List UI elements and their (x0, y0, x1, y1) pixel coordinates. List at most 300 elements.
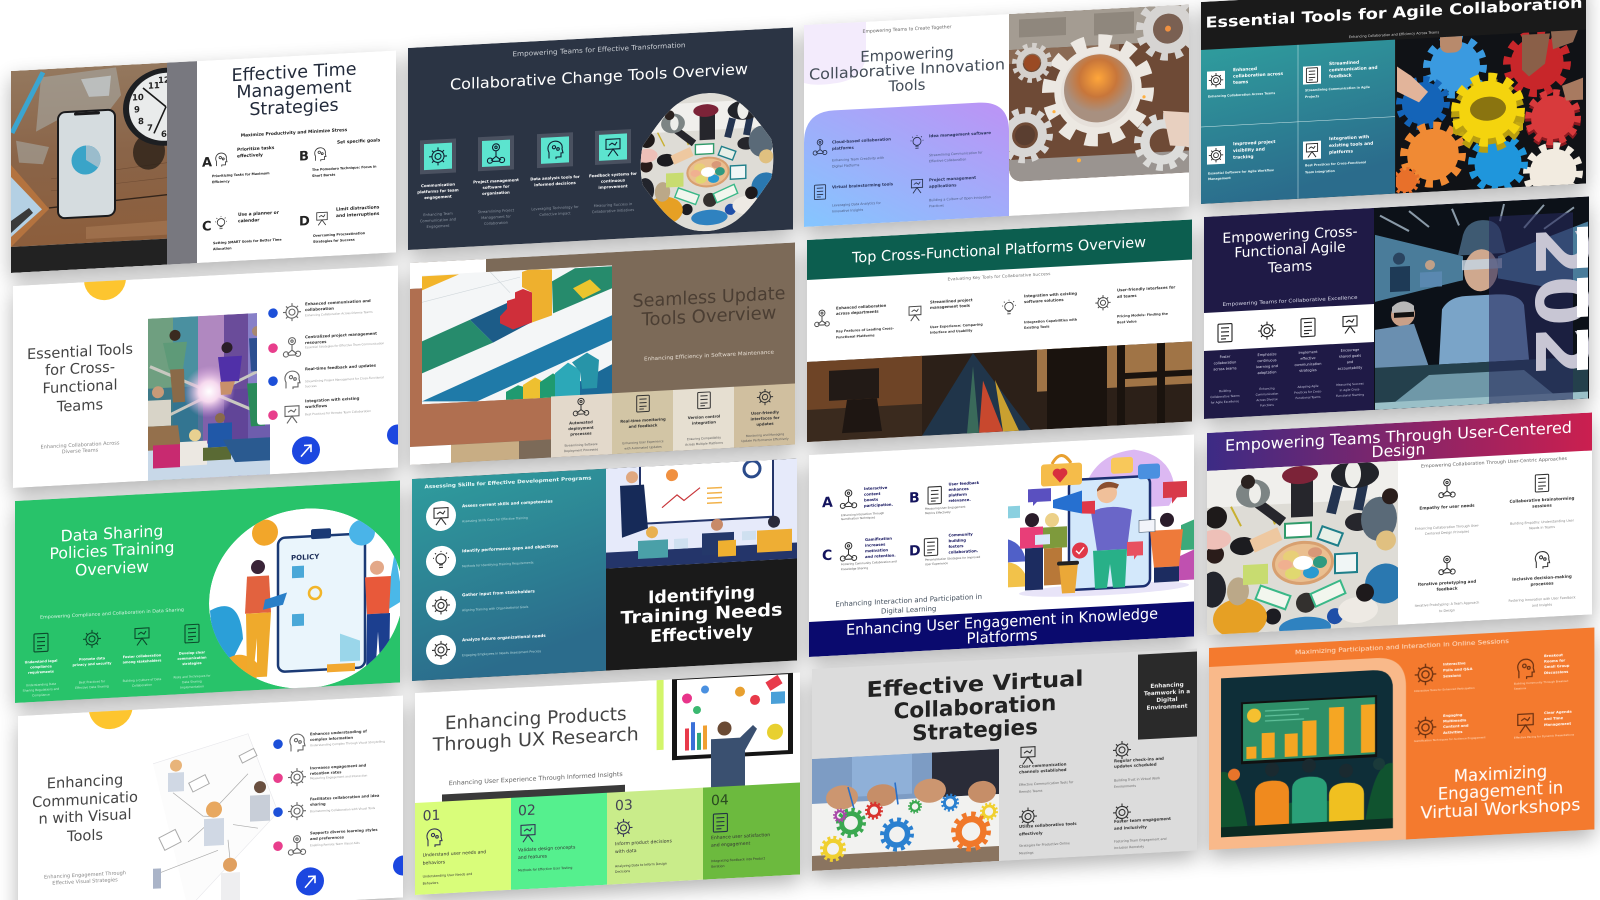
item 2: Methods for Identifying Training Requirements (462, 561, 534, 568)
item D: Strategies for Success (313, 238, 355, 244)
column 4 (173, 624, 211, 690)
item 3: to Design (1439, 608, 1455, 613)
column 2 (73, 629, 112, 690)
item A: A (202, 155, 212, 171)
panel: Empowering Cross-Functional Agile Teams: Functional Agile (1234, 239, 1346, 261)
item 2 (1510, 473, 1575, 531)
panel: Identifying Training Needs Effectively: Effectively (650, 622, 754, 647)
item 1: platforms for team (417, 187, 459, 195)
item 4: User-friendly interfaces for (1117, 284, 1175, 292)
item 3: Improved project (1233, 139, 1276, 147)
card 03: with data (615, 848, 637, 855)
column 3: strategies (1299, 368, 1317, 373)
item 2 (1514, 653, 1570, 691)
item A: Prioritize tasks (237, 145, 275, 153)
item 3: Integration with existing (1024, 291, 1077, 298)
item 2: Building Community Through Breakout (1514, 679, 1569, 686)
item 4: Inclusive decision-making (1512, 574, 1572, 582)
subtitle: Evaluating Key Tools for Collaborative Success (947, 271, 1050, 282)
column 1: requirements (28, 670, 54, 675)
item 2 (268, 330, 384, 358)
item 3: Streamlining Project Management for Cross-Functional (305, 375, 384, 383)
card 2: Enhancing User Experience (622, 439, 664, 445)
item 1: Assess current skills and competencies (462, 498, 553, 508)
panel: Empowering Cross-Functional Agile Teams: Adapting Agile (1297, 384, 1319, 389)
title: Seamless Update (632, 283, 785, 312)
photo: phone and clock on wood: 6 (161, 130, 167, 140)
item 2: communication and (1329, 65, 1378, 73)
panel: Empowering Cross-Functional Agile Teams: Functional Teaming (1336, 392, 1364, 398)
item 4: Team Integration (1305, 169, 1335, 174)
item 1 (417, 138, 459, 230)
photo: phone and clock on wood: 7 (147, 123, 153, 134)
item 3: Gather input from stakeholders (462, 588, 535, 597)
panel: Essential Tools for Agile Collaboration (1201, 0, 1586, 217)
item 2: Small Group (1544, 664, 1570, 669)
item D: collaboration. (948, 548, 979, 555)
screen with analyst (672, 670, 793, 791)
panel: Essential Tools for Cross-Functional Teams: Functional (42, 376, 118, 397)
item 1: platforms (832, 145, 854, 151)
card 2: with Automated Updates (624, 445, 662, 451)
item 4: and preferences (310, 835, 345, 841)
item C: motivation (865, 547, 888, 553)
item 3 (1207, 139, 1276, 181)
item C: Use a planner or (238, 210, 280, 218)
arrow button (296, 867, 324, 896)
item 2: Essential Strategies for Effective Team Communication (305, 341, 384, 349)
item A: participation. (864, 502, 894, 508)
item 2: Streamlining Project (478, 208, 515, 214)
item 1: across departments (836, 309, 879, 316)
item 2: User Experience: Comparing (930, 322, 983, 329)
item 4: Measuring Success in (594, 202, 632, 208)
column 1: across teams (1213, 366, 1237, 371)
card 04: 04 (711, 792, 729, 809)
column 3: communication (1294, 362, 1322, 367)
panel: Effective Virtual Collaboration Strategies (812, 648, 1197, 871)
item 4: Fostering Team Engagement and (1114, 837, 1167, 844)
item 2: Streamlined (1329, 60, 1359, 67)
item 3: Gamification Techniques for Audience Engagement (1414, 735, 1486, 743)
item 1 (1414, 661, 1475, 693)
item 2: Discussions (1544, 670, 1569, 675)
panel: Empowering Cross-Functional Agile Teams: for Agile Excellence (1211, 399, 1239, 405)
grey band (167, 61, 197, 265)
item C: and retention. (865, 552, 896, 559)
item D (299, 204, 380, 245)
column 4: Encourage (1341, 348, 1359, 353)
item 2 (426, 540, 559, 577)
panel: Data Sharing Policies Training Overview: Policies Training (50, 538, 174, 563)
column 1: Compliance (32, 693, 50, 697)
item 2: Environments (1114, 784, 1136, 789)
title: Effective Virtual (867, 667, 1084, 703)
item 1: Remote Teams (1019, 789, 1043, 794)
panel: Empowering Cross-Functional Agile Teams: Practices for Cross- (1294, 389, 1322, 395)
item 3: Brainstorming Collaboration with Visual Tools (310, 806, 376, 813)
item D: D (299, 214, 310, 230)
panel: Seamless Update Tools Overview (410, 242, 795, 465)
card 3: Ensuring Compatibility (687, 435, 721, 441)
column 4: Develop clear (179, 650, 205, 656)
item 3: Integration Capabilities with (1024, 318, 1078, 324)
item 3 (1415, 554, 1479, 614)
item 4: Collaborative Initiatives (592, 208, 634, 214)
item 1: Key Features of Leading Cross- (836, 326, 894, 333)
panel: Empowering Teams Through User-Centered Design (1193, 412, 1592, 669)
column 2: Emphasize (1258, 352, 1276, 357)
item D (909, 531, 980, 567)
illustration: connected people sketch (153, 732, 278, 900)
panel: Empowering Cross-Functional Agile Teams (1204, 196, 1600, 419)
item 1: Enhancing Team (423, 212, 453, 217)
item 4 (1095, 284, 1175, 326)
item A: Interactive (864, 485, 888, 491)
eyebrow: Empowering Teams to Create Together (863, 24, 952, 35)
item 1 (1207, 65, 1283, 99)
item 2: feedback (1329, 73, 1352, 80)
card 2: Real-time monitoring (620, 416, 666, 424)
item 4: Feedback systems for (589, 171, 637, 178)
item B: B (909, 490, 920, 507)
item 4: Pricing Models: Finding the (1117, 312, 1169, 318)
title: Essential Tools (27, 341, 133, 363)
panel: Top Cross-Functional Platforms Overview (807, 219, 1192, 442)
column 2: continuous (1257, 358, 1277, 363)
item 4 (589, 129, 637, 214)
item 1 (426, 495, 553, 532)
column 3: Collaboration (132, 683, 152, 688)
card 03: 03 (615, 797, 633, 814)
item 3: Management (1208, 176, 1231, 181)
photo: futuristic helmet team (1374, 196, 1589, 410)
panel: Empowering Cross-Functional Agile Teams: Communication (1256, 392, 1279, 397)
item 2: Regular check-ins and (1114, 756, 1164, 763)
panel: Essential Tools for Cross-Functional Teams: for Cross- (45, 359, 115, 379)
white icon band (1204, 304, 1374, 351)
title: Empowering Cross- (1222, 224, 1358, 247)
panel: Seamless Update Tools Overview: Tools Overview (641, 302, 776, 331)
item 2 (911, 130, 991, 164)
item 2: management tools (930, 303, 971, 310)
item B: Measuring User Engagement (925, 505, 966, 511)
item 4 (273, 828, 378, 856)
column 4: Risks and Techniques for (173, 674, 211, 680)
teal grid panel (1201, 40, 1395, 204)
title: Enhancing Products (445, 704, 627, 734)
item 3: Facilitates collaboration and idea (310, 794, 380, 801)
card 02: and features (518, 853, 548, 861)
item 4: Management (1544, 722, 1571, 727)
item C (822, 535, 897, 572)
item B: enhances (948, 486, 970, 492)
card 03: Inform product decisions (615, 838, 672, 847)
item 2: sessions (1532, 503, 1552, 509)
item 1: channels established (1019, 767, 1067, 774)
title: Enhancing User Engagement in Knowledge (846, 604, 1158, 639)
column 4: and (1347, 360, 1353, 364)
panel: Essential Tools for Cross-Functional Teams (13, 266, 398, 488)
item 1: Engagement (427, 224, 450, 229)
panel: Empowering Cross-Functional Agile Teams: Functions (1260, 403, 1274, 408)
photo: team in circle (1193, 457, 1413, 669)
item 1 (815, 302, 894, 341)
item 4 (911, 174, 991, 209)
panel: Effective Virtual Collaboration Strategies: Collaboration (894, 691, 1056, 725)
item 2: retention rates (310, 770, 342, 776)
teal panel (412, 469, 606, 681)
card 01: Behaviors (423, 881, 439, 886)
item 3: Existing Tools (1024, 325, 1049, 330)
card 04: Integrating Feedback into Product (711, 856, 766, 863)
item 1: Enhancing Collaboration Through User- (1415, 523, 1480, 531)
item 4: Supports diverse learning styles (310, 828, 378, 835)
dark callout box: Environment (1147, 704, 1188, 712)
item 4: workflows (305, 403, 328, 409)
item 1: Communication and (420, 217, 456, 223)
colour blocks (410, 255, 551, 465)
item 2: Effective Collaboration (929, 157, 966, 163)
footer band (809, 601, 1194, 657)
item 4: platforms (1329, 148, 1353, 156)
panel: Essential Tools for Cross-Functional Teams: Teams (56, 396, 103, 416)
item 4: existing tools and (1329, 141, 1373, 149)
item 4: Inclusion Remotely (1114, 844, 1144, 850)
item 4: applications (929, 182, 957, 189)
item 4: Fostering Innovation with User Feedback (1508, 595, 1576, 603)
panel: Empowering Collaborative Innovation Tools: Tools (888, 76, 926, 96)
panel: Effective Time Management Strategies: Strategies (249, 96, 339, 120)
card 02 (511, 793, 607, 890)
card 2 (612, 390, 673, 454)
item 1: engagement (424, 194, 452, 200)
item 3: effectively (1019, 830, 1043, 836)
title: Identifying (648, 583, 755, 608)
item 4: and Insights (1532, 603, 1552, 608)
gradient panel (804, 101, 1009, 227)
card 01: Understanding User Needs and (423, 872, 472, 879)
item 3: Collective Impact (539, 211, 571, 217)
item 3 (1414, 712, 1486, 743)
item 1 (268, 298, 373, 322)
dark callout box: Digital (1156, 697, 1178, 704)
yellow half circle (84, 280, 126, 300)
column 4: Implementation (180, 684, 204, 690)
panel: Enhancing User Engagement in Knowledge Platforms (809, 434, 1194, 657)
item A: Gamification Techniques (841, 515, 876, 521)
item 1: Enhances understanding of (310, 729, 367, 736)
item A: boosts (864, 497, 879, 502)
header band (807, 219, 1192, 280)
panel: Empowering Cross-Functional Agile Teams: Functional Teams (1296, 395, 1321, 400)
item 2 (909, 297, 983, 336)
item D: Personalization Strategies for Improved (925, 555, 980, 562)
subtitle: Enhancing Interaction and Participation in (835, 593, 982, 609)
item 3: visibility and (1233, 146, 1265, 154)
subtitle: Enhancing Collaboration and Efficiency Across Teams (1349, 30, 1439, 39)
item 1: Sessions (1443, 674, 1462, 679)
subtitle: Enhancing User Experience Through Informed Insights (449, 771, 623, 787)
card 03 (607, 788, 703, 885)
item 1: Functional Platforms (836, 333, 875, 339)
card 3 (673, 387, 734, 451)
illustration: audience watching bar chart (1221, 669, 1393, 837)
item B: B (299, 149, 309, 165)
column 4: Data Sharing (182, 679, 202, 684)
item 2: Building Trust in Virtual Work (1114, 776, 1160, 783)
panel: Empowering Cross-Functional Agile Teams: in Agile Cross- (1340, 387, 1360, 392)
item B: User feedback (948, 480, 980, 487)
item 1: Clear communication (1019, 761, 1067, 769)
photo: pyramid in a dark office (807, 341, 1192, 442)
item 1 (1019, 745, 1074, 794)
item 3: Leveraging Technology for (531, 205, 579, 211)
card 04: and engagement (711, 841, 750, 849)
card 1: Streamlining Software (564, 442, 598, 448)
item 3: Innovative Insights (832, 208, 864, 214)
item 3 (814, 181, 894, 214)
column 3: Building a Culture of Data (123, 677, 162, 683)
panel: Data Sharing Policies Training Overview (15, 480, 403, 704)
item 1: Enhancing Team Creativity with (832, 156, 884, 163)
item 1: Enhanced collaboration (836, 303, 887, 310)
panel: Enhancing Products Through UX Research (415, 669, 800, 895)
item 4: Best Practices for Remote Team Collaboration (305, 409, 371, 416)
card 1: deployment (568, 425, 594, 431)
column 2: Effective Data Sharing (75, 684, 109, 690)
column 1: collaboration (1214, 360, 1236, 365)
subtitle: Empowering Collaboration Through User-Centric Approaches (1421, 456, 1568, 470)
item 4: Integration with (1329, 134, 1369, 142)
item 4: Building a Culture of Open Innovation (929, 195, 991, 202)
panel: Enhancing Communication with Visual Tools: n with Visual (38, 806, 132, 828)
card 3: Across Multiple Platforms (685, 441, 723, 447)
panel: Enhancing User Engagement in Knowledge Platforms: Platforms (966, 626, 1038, 648)
column 1: Understanding Data (26, 682, 56, 687)
column 4: communication (177, 655, 207, 661)
item 2: Collaborative brainstorming (1510, 495, 1574, 504)
panel: Maximizing Engagement in Virtual Workshops: Virtual Workshops (1420, 795, 1581, 823)
panel: Effective Virtual Collaboration Strategies: Strategies (912, 715, 1038, 747)
item D: Community (948, 531, 973, 538)
photo: team with light burst (148, 312, 270, 481)
panel: Data Sharing Policies Training Overview: Overview (75, 557, 149, 580)
item 1: Enhancing Collaboration Across Teams (1208, 91, 1275, 99)
item 1: teams (1233, 79, 1249, 86)
photo: gears (1009, 4, 1189, 182)
item 3: Engaging (1443, 713, 1463, 718)
item 4: Best Practices for Cross-Functional (1305, 160, 1366, 167)
item 4: Effective Pacing for Dynamic Presentations (1514, 733, 1575, 740)
item C: Setting SMART Goals for Better Time (213, 238, 282, 245)
item 3: Iterative Prototyping: A Team Approach (1415, 600, 1479, 608)
photo: phone and clock on wood (11, 62, 167, 273)
card 3: Version control (688, 413, 720, 420)
item 4: improvement (598, 183, 628, 190)
panel: Identifying Training Needs Effectively: Training Needs (620, 600, 782, 629)
column 4: accountability (1338, 366, 1362, 371)
subtitle: Enhancing Efficiency in Software Maintenance (644, 350, 774, 363)
photo: phone and clock on wood: 11 (148, 81, 160, 92)
item 4: Enabling Remote Team Visual Aids (310, 841, 360, 847)
column 4: shared goals (1339, 354, 1361, 359)
item 1: Interactive (1443, 661, 1466, 667)
card 01: Understand user needs and (423, 849, 486, 859)
panel heading: Assessing Skills for Effective Development Programs (424, 475, 592, 490)
card 02: 02 (518, 803, 536, 820)
item 2: Measuring Engagement and Interaction (310, 773, 367, 780)
title: Enhancing (47, 771, 123, 792)
photo: phone and clock on wood: 9 (134, 105, 140, 115)
item 1: Enhanced (1233, 66, 1257, 73)
item 4: continuous (601, 177, 626, 184)
column 3: Foster collaboration (123, 653, 162, 659)
item 3: Multimedia (1443, 718, 1467, 724)
card 1 (551, 393, 612, 457)
item 3 (1019, 805, 1077, 855)
item 4: Analyze future organizational needs (462, 633, 546, 642)
item 1 (1415, 477, 1480, 536)
lime accent (657, 680, 664, 750)
item 4 (426, 629, 546, 666)
panel: Empowering Cross-Functional Agile Teams: Enhancing (1259, 386, 1275, 391)
column 1: Foster (1220, 355, 1231, 359)
item 1: complex information (310, 736, 353, 742)
list panel backdrop (270, 305, 398, 474)
item 3: Leveraging Data Analytics for (832, 201, 881, 208)
dark callout box (1138, 651, 1197, 740)
item 3: Strategies for Productive Online (1019, 841, 1070, 848)
item C: Fostering Community Collaboration and (841, 559, 897, 566)
panel: Enhancing Products Through UX Research: Through UX Research (432, 724, 639, 756)
translucent overlay (1489, 212, 1573, 404)
card 1: Automated (569, 419, 593, 426)
card 3: integration (692, 419, 716, 426)
title: Collaborative Change Tools Overview (450, 60, 748, 94)
item 2: Idea management software (929, 130, 991, 138)
item A (202, 145, 275, 185)
item 3: tracking (1233, 154, 1254, 161)
item 1: Centered Design Principles (1425, 530, 1469, 536)
panel: Empowering Collaborative Innovation Tools: Collaborative Innovation (809, 55, 1005, 84)
item 4: all teams (1117, 293, 1137, 299)
dark bar (442, 785, 625, 803)
column 4: strategies (182, 661, 202, 666)
item 3: Meetings (1019, 851, 1034, 855)
item C: Allocation (213, 246, 232, 251)
title: Empowering (860, 43, 954, 66)
card 4: interfaces for (750, 415, 780, 421)
item C: Gamification (865, 536, 892, 542)
subtitle: Digital Learning (881, 605, 936, 616)
item 1: collaboration across (1233, 71, 1283, 80)
photo: phone and clock on wood: 8 (138, 117, 144, 127)
item 4 (1113, 801, 1171, 850)
illustration: policy clipboard and two people (209, 503, 403, 694)
item 1: Enhanced communication and (305, 298, 371, 306)
item 4 (1303, 134, 1373, 175)
panel: Enhancing Communication with Visual Tools: Communicatio (32, 789, 138, 811)
title: Data Sharing (61, 521, 163, 546)
item 2: Streamlined project (930, 297, 973, 304)
item 1: Assessing Skills Gaps for Effective Training (462, 516, 528, 523)
panel: Empowering Teams Through User-Centered Design: Design (1372, 440, 1425, 461)
item 2: Identify performance gaps and objectives (462, 543, 559, 553)
card 03: Analyzing Data to Inform Design (615, 862, 667, 868)
card 02: Validate design concepts (518, 844, 576, 854)
item 4: Foster team engagement (1114, 816, 1171, 824)
